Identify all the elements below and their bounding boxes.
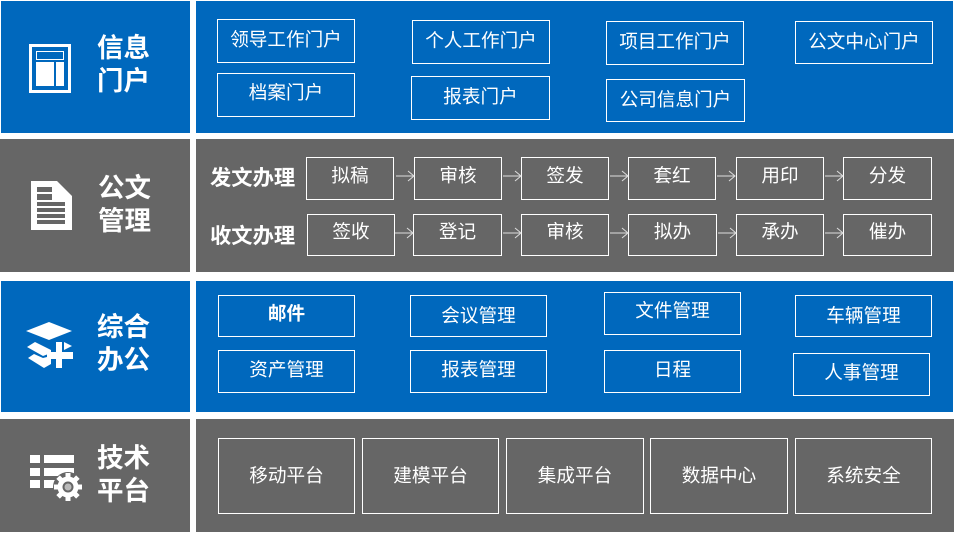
panel: 综合办公 content <box>196 281 953 412</box>
group: 综合办公 items <box>218 292 932 396</box>
日程: 日程 <box>654 359 691 380</box>
icon: layers with plus <box>26 322 73 368</box>
arrow <box>396 170 414 182</box>
panel: 信息门户 content <box>196 1 953 133</box>
arrow <box>610 170 628 182</box>
arrow <box>825 228 844 238</box>
group: 技术平台 items <box>218 438 932 514</box>
step: 用印 <box>761 164 799 186</box>
step: 承办 <box>761 220 799 242</box>
文件管理: 文件管理 <box>635 300 710 321</box>
heading: 公文管理: 管理 <box>98 206 151 236</box>
系统安全: 系统安全 <box>826 465 901 486</box>
公文中心门户 <box>795 21 933 64</box>
项目工作门户 <box>606 21 744 65</box>
报表门户 <box>411 76 550 120</box>
邮件: 邮件 <box>268 302 305 324</box>
heading: 信息门户 <box>97 33 150 96</box>
heading: 技术平台 <box>97 443 150 506</box>
资产管理: 资产管理 <box>249 359 324 380</box>
文件管理 <box>604 292 741 335</box>
panel: 公文管理 content <box>196 139 954 272</box>
heading: 发文办理: 发文办理 <box>210 166 295 190</box>
公司信息门户 <box>606 79 745 122</box>
移动平台 <box>218 438 355 514</box>
arrow <box>395 228 414 238</box>
heading: 公文管理: 公文 <box>98 173 151 203</box>
step: 拟办 <box>654 220 691 242</box>
step: 签发 <box>546 164 584 186</box>
报表门户: 报表门户 <box>443 86 518 107</box>
资产管理 <box>218 350 355 393</box>
数据中心: 数据中心 <box>682 465 756 486</box>
移动平台: 移动平台 <box>249 465 324 486</box>
step: 拟稿 <box>331 164 369 186</box>
flow: 发文办理 steps <box>306 157 932 200</box>
arrow <box>503 228 522 238</box>
step <box>414 157 502 200</box>
step <box>628 214 717 256</box>
step <box>736 214 824 256</box>
heading: 技术平台: 技术 <box>97 443 150 473</box>
日程 <box>604 350 741 393</box>
公文中心门户: 公文中心门户 <box>808 31 920 52</box>
icon: list with gear <box>30 455 82 501</box>
arrow <box>825 170 844 182</box>
step: 审核 <box>439 164 477 186</box>
公司信息门户: 公司信息门户 <box>620 88 731 110</box>
heading: 收文办理: 收文办理 <box>210 224 295 248</box>
建模平台: 建模平台 <box>393 465 468 486</box>
报表管理 <box>410 350 547 393</box>
车辆管理 <box>795 295 932 337</box>
集成平台: 集成平台 <box>538 465 612 486</box>
人事管理 <box>793 353 930 396</box>
车辆管理: 车辆管理 <box>826 304 901 326</box>
panel: 技术平台 content <box>196 419 954 532</box>
档案门户: 档案门户 <box>249 82 323 103</box>
step: 分发 <box>869 164 906 186</box>
step: 签收 <box>332 220 370 242</box>
arrow <box>717 170 736 182</box>
heading: 信息门户: 门户 <box>97 66 150 96</box>
arrow <box>610 228 628 238</box>
个人工作门户: 个人工作门户 <box>425 30 537 51</box>
step <box>521 214 609 256</box>
panel: 技术平台 label <box>0 419 190 532</box>
heading: 综合办公: 综合 <box>97 312 150 342</box>
系统安全 <box>795 438 932 514</box>
集成平台 <box>506 438 644 514</box>
step <box>413 214 502 256</box>
heading: 综合办公: 办公 <box>97 345 150 375</box>
arrow <box>718 228 736 238</box>
领导工作门户 <box>217 19 355 63</box>
step <box>306 157 394 200</box>
icon: document <box>31 181 72 230</box>
step <box>843 214 932 256</box>
flow: 收文办理 steps <box>307 214 932 256</box>
group: 门户 items <box>217 19 933 122</box>
panel: 公文管理 label <box>0 139 190 272</box>
档案门户 <box>217 73 355 117</box>
step <box>843 157 932 200</box>
项目工作门户: 项目工作门户 <box>619 31 731 52</box>
数据中心 <box>650 438 788 514</box>
step <box>307 214 395 256</box>
arrow <box>503 170 522 182</box>
会议管理 <box>410 295 547 337</box>
邮件 <box>218 295 355 337</box>
step: 登记 <box>439 220 476 242</box>
人事管理: 人事管理 <box>824 362 899 383</box>
领导工作门户: 领导工作门户 <box>230 28 342 50</box>
heading: 公文管理 <box>98 173 151 236</box>
建模平台 <box>362 438 499 514</box>
step: 套红 <box>653 164 691 186</box>
icon: portal layout <box>29 44 71 93</box>
heading: 信息门户: 信息 <box>97 33 150 63</box>
step: 审核 <box>546 220 584 242</box>
panel: 信息门户 label <box>1 1 190 133</box>
step <box>736 157 824 200</box>
panel: 综合办公 label <box>1 281 190 412</box>
报表管理: 报表管理 <box>441 359 516 380</box>
step <box>521 157 609 200</box>
个人工作门户 <box>412 20 550 64</box>
step: 催办 <box>869 220 906 242</box>
heading: 技术平台: 平台 <box>97 476 150 506</box>
step <box>628 157 716 200</box>
heading: 综合办公 <box>97 312 150 375</box>
会议管理: 会议管理 <box>441 304 516 326</box>
